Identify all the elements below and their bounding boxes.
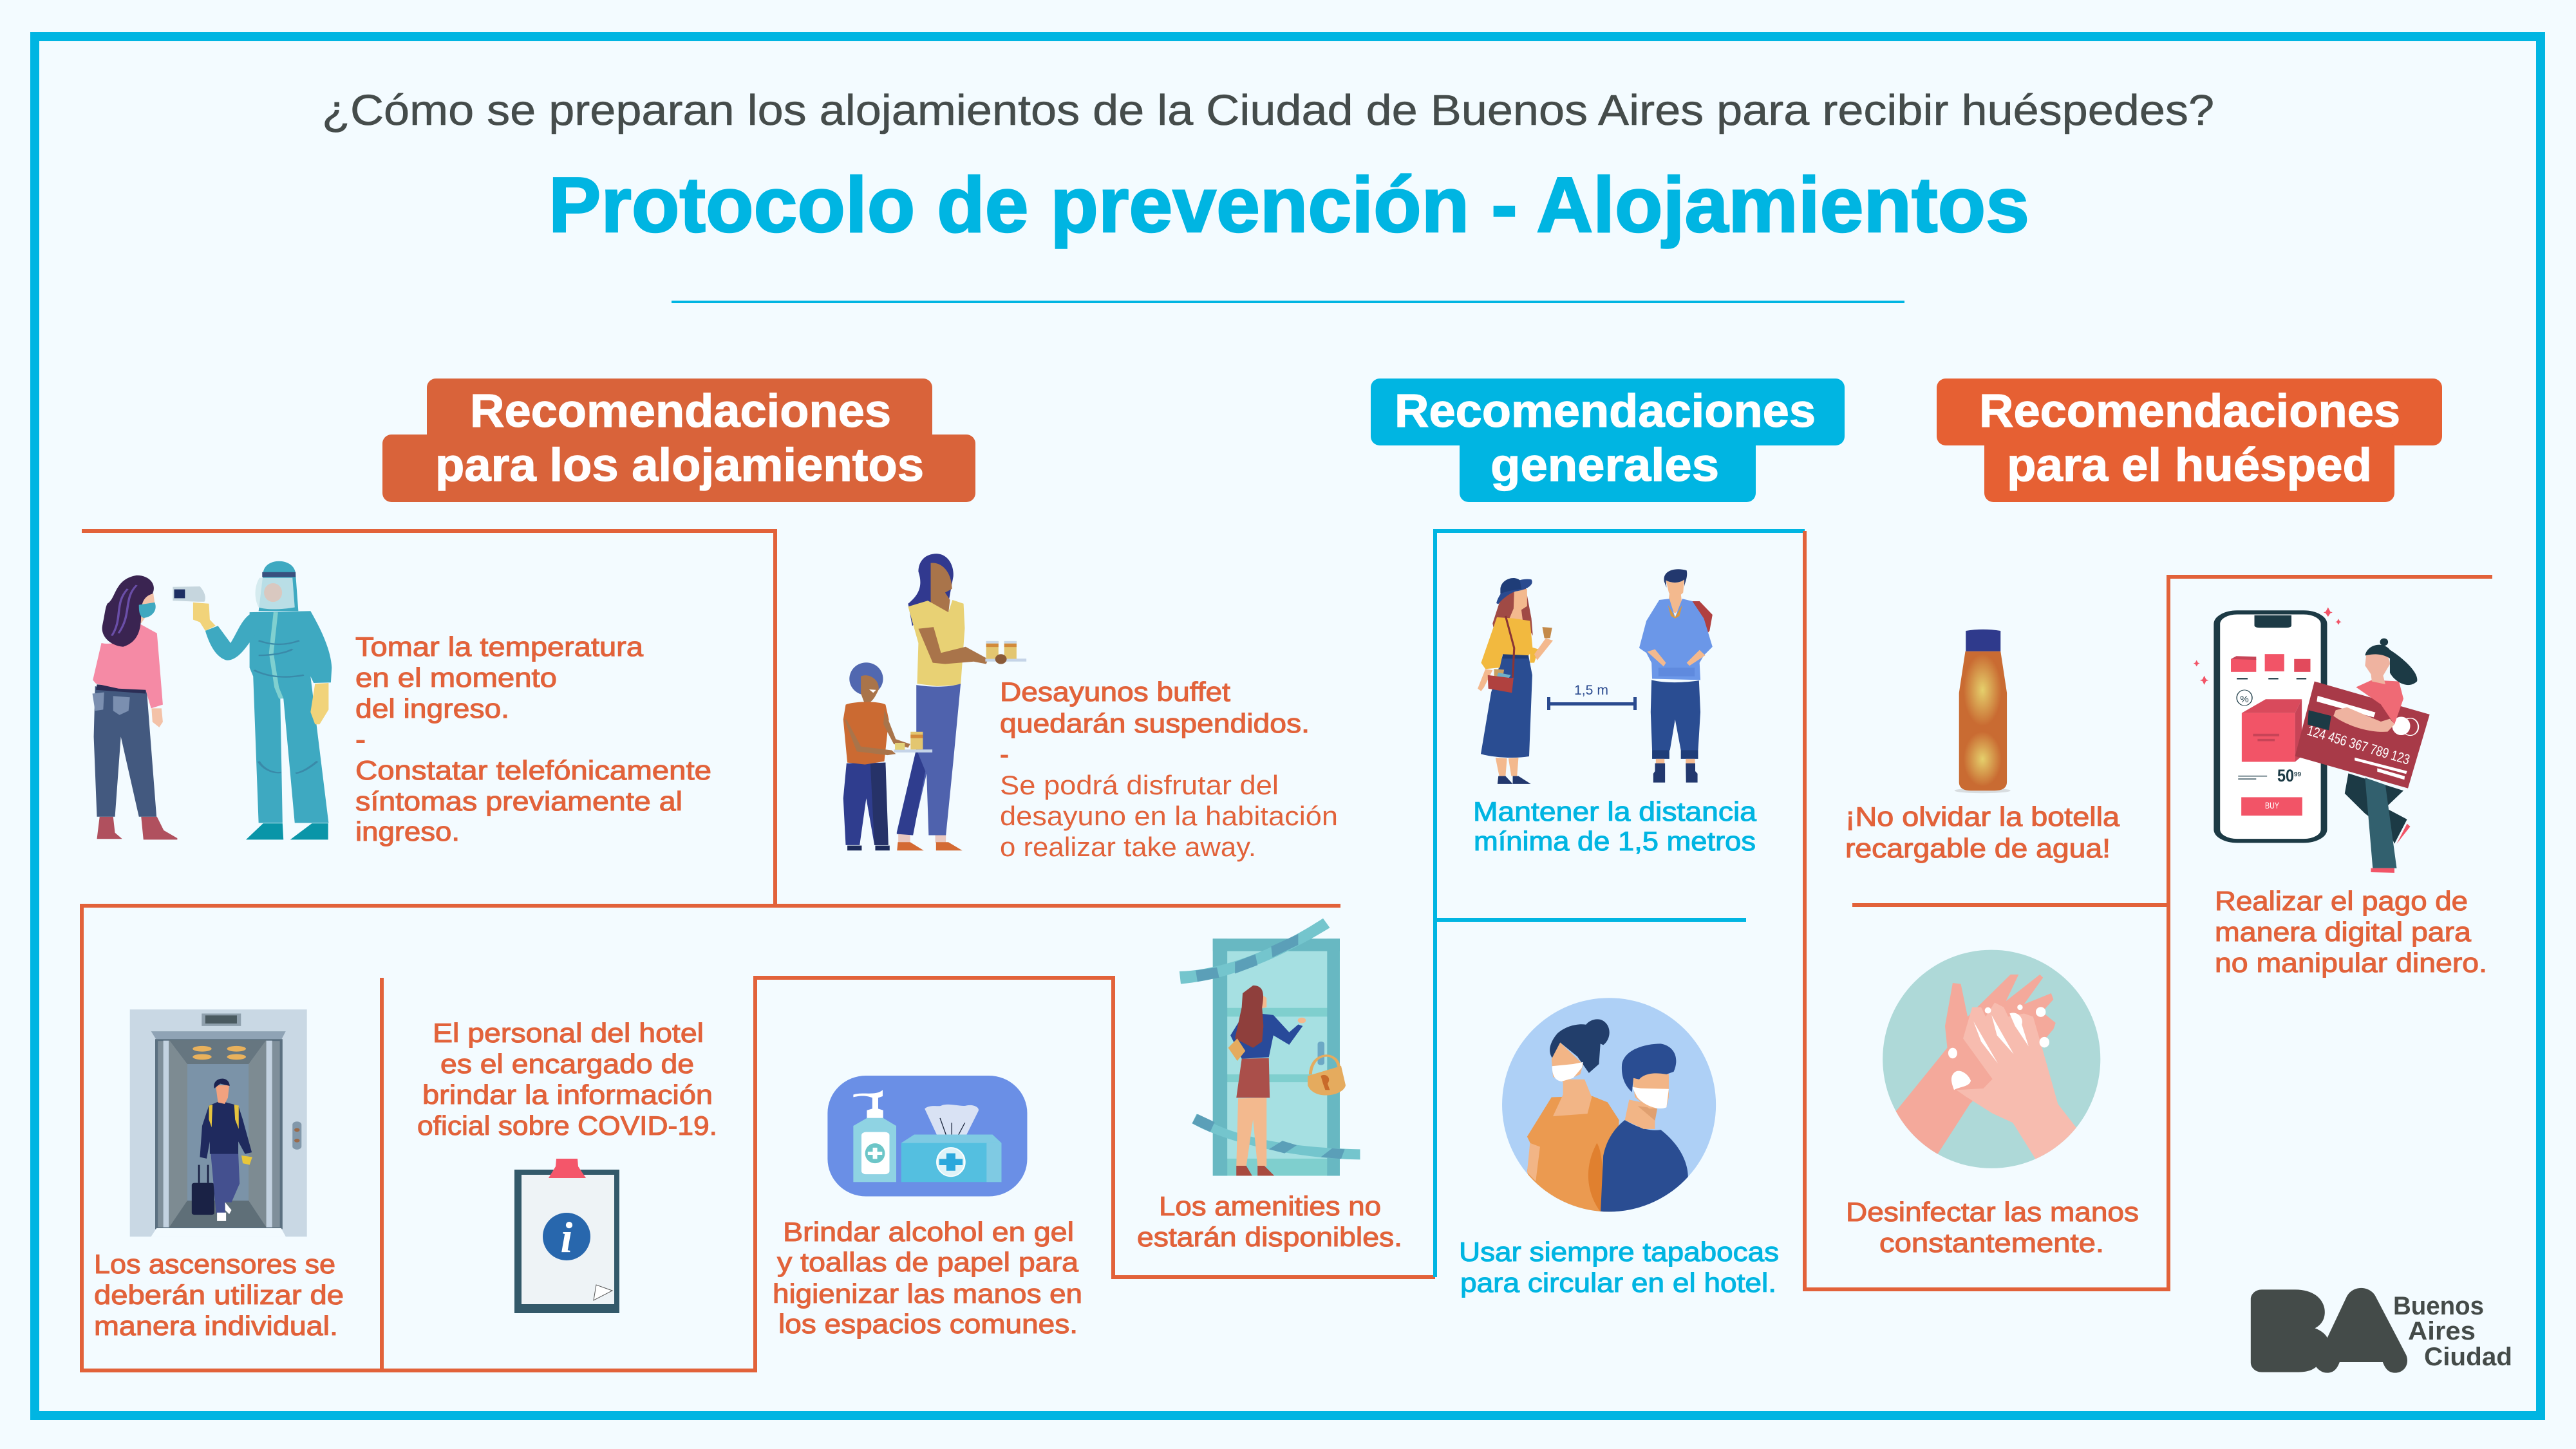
text: desayunos: - xyxy=(1000,739,1009,769)
logo: Buenos Aires Ciudad: Buenos xyxy=(2393,1292,2484,1320)
text: alcohol en gel: y toallas de papel para xyxy=(777,1247,1079,1277)
traveller xyxy=(192,1079,252,1221)
adult xyxy=(897,554,1026,850)
icon: phone and card payment: 99 xyxy=(2294,771,2302,778)
woman legs xyxy=(2345,773,2407,844)
text: personal del hotel xyxy=(417,1018,717,1141)
health worker xyxy=(173,561,332,839)
text: ascensores xyxy=(94,1249,344,1341)
icon: gel and tissues xyxy=(827,1076,1027,1197)
icon: washing hands xyxy=(1883,950,2100,1170)
icon: phone and card payment: BUY xyxy=(2265,800,2279,810)
icon: phone and card payment xyxy=(2194,607,2430,873)
phone xyxy=(2217,612,2324,841)
text: alcohol en gel xyxy=(773,1217,1082,1339)
icon: refillable bottle xyxy=(1955,630,2011,793)
woman with hat xyxy=(1478,578,1553,784)
text: mantener la distancia: mínima de 1,5 metros xyxy=(1474,826,1756,856)
icon: clipboard with information: i xyxy=(561,1213,573,1262)
heading: recomendaciones para el huésped xyxy=(1937,379,2442,502)
subtitle: ¿Cómo se preparan los alojamientos de la Ciudad de Buenos Aires para recibir huéspedes? xyxy=(322,86,2214,135)
title: Protocolo de prevención - Alojamientos xyxy=(549,161,2029,248)
heading: recomendaciones para los alojamientos: para los alojamientos xyxy=(435,440,924,491)
icon: phone and card payment: 124 456 367 789 123 xyxy=(2306,722,2412,768)
heading: recomendaciones para los alojamientos: Recomendaciones xyxy=(470,386,891,437)
logo: Buenos Aires Ciudad: Ciudad xyxy=(2424,1343,2512,1371)
text: personal del hotel: brindar la información xyxy=(422,1080,713,1110)
text: tomar la temperatura: ingreso. xyxy=(355,816,460,846)
text: pago digital: no manipular dinero. xyxy=(2215,948,2487,978)
woman xyxy=(92,575,177,839)
text: pago digital: manera digital para xyxy=(2215,917,2472,947)
text: desayunos: Desayunos buffet xyxy=(1000,677,1230,707)
child xyxy=(843,662,932,850)
text: desayunos: o realizar take away. xyxy=(1000,832,1256,862)
text: amenities: Los amenities no xyxy=(1159,1191,1381,1221)
credit card xyxy=(2295,682,2430,789)
distance marker xyxy=(1547,683,1637,710)
text: tapabocas: para circular en el hotel. xyxy=(1460,1267,1776,1298)
text: mantener la distancia: Mantener la distancia xyxy=(1473,796,1757,827)
text: tomar la temperatura: síntomas previamente al xyxy=(355,786,682,816)
text: desinfectar: Desinfectar las manos xyxy=(1846,1197,2139,1227)
woman upper body xyxy=(2356,680,2403,725)
text: tomar la temperatura: - xyxy=(355,724,366,754)
text: tapabocas xyxy=(1459,1237,1779,1298)
panel borders xyxy=(82,531,2492,1370)
text: desinfectar: constantemente. xyxy=(1879,1228,2104,1258)
icon: phone and card payment: % xyxy=(2240,694,2249,705)
text: ascensores: deberán utilizar de xyxy=(94,1280,344,1310)
text: personal del hotel: es el encargado de xyxy=(440,1049,694,1079)
text: alcohol en gel: Brindar alcohol en gel xyxy=(783,1217,1074,1247)
text: tomar la temperatura: Constatar telefónicamente xyxy=(355,755,711,785)
icon: breakfast trays xyxy=(843,554,1026,850)
icon: elevator xyxy=(130,1009,307,1237)
sparkles xyxy=(2194,607,2342,685)
text: desayunos: desayuno en la habitación xyxy=(1000,801,1338,831)
logo: Buenos Aires Ciudad: Aires xyxy=(2408,1317,2476,1345)
man with backpack xyxy=(1639,569,1713,783)
text: pago digital xyxy=(2215,886,2487,978)
text: desayunos xyxy=(1000,677,1338,862)
text: pago digital: Realizar el pago de xyxy=(2215,886,2468,916)
text: desayunos: Se podrá disfrutar del xyxy=(1000,770,1279,800)
heading: recomendaciones para el huésped: para el huésped xyxy=(2007,440,2372,491)
text: alcohol en gel: higienizar las manos en xyxy=(773,1278,1082,1309)
text: tomar la temperatura: en el momento xyxy=(355,662,557,693)
text: amenities xyxy=(1137,1191,1402,1252)
heading: recomendaciones para los alojamientos xyxy=(382,379,975,502)
text: botella: ¡No olvidar la botella xyxy=(1845,801,2120,832)
woman at door xyxy=(1228,986,1306,1176)
icon: phone and card payment: 50 xyxy=(2277,766,2294,785)
text: desayunos: quedarán suspendidos. xyxy=(1000,708,1310,738)
heading: recomendaciones para el huésped: Recomendaciones xyxy=(1979,386,2400,437)
padlock xyxy=(1308,1042,1346,1096)
heading: recomendaciones generales: Recomendaciones xyxy=(1395,386,1816,437)
text: botella: recargable de agua! xyxy=(1845,833,2111,863)
logo: Buenos Aires Ciudad xyxy=(2251,1288,2512,1373)
text: botella xyxy=(1845,801,2120,863)
icon: temperature check xyxy=(92,561,332,839)
heading: recomendaciones generales: generales xyxy=(1490,440,1719,491)
text: tomar la temperatura: del ingreso. xyxy=(355,693,509,724)
heading: recomendaciones generales xyxy=(1371,379,1845,502)
icon: clipboard with information xyxy=(514,1159,619,1313)
text: ascensores: Los ascensores se xyxy=(94,1249,335,1279)
icon: locked door xyxy=(1180,919,1360,1176)
text: desinfectar xyxy=(1846,1197,2139,1258)
text: mantener la distancia xyxy=(1473,796,1757,856)
icon: two people at a distance xyxy=(1478,569,1713,784)
icon: people wearing masks xyxy=(1502,998,1716,1217)
text: tomar la temperatura: Tomar la temperatura xyxy=(355,631,644,662)
text: tomar la temperatura xyxy=(355,631,711,846)
distance marker: 1,5 m xyxy=(1574,683,1608,698)
text: ascensores: manera individual. xyxy=(94,1311,338,1341)
text: tapabocas: Usar siempre tapabocas xyxy=(1459,1237,1779,1267)
text: personal del hotel: El personal del hotel xyxy=(433,1018,704,1048)
text: personal del hotel: oficial sobre COVID-19. xyxy=(417,1110,717,1141)
text: alcohol en gel: los espacios comunes. xyxy=(778,1309,1078,1339)
text: amenities: estarán disponibles. xyxy=(1137,1222,1402,1252)
